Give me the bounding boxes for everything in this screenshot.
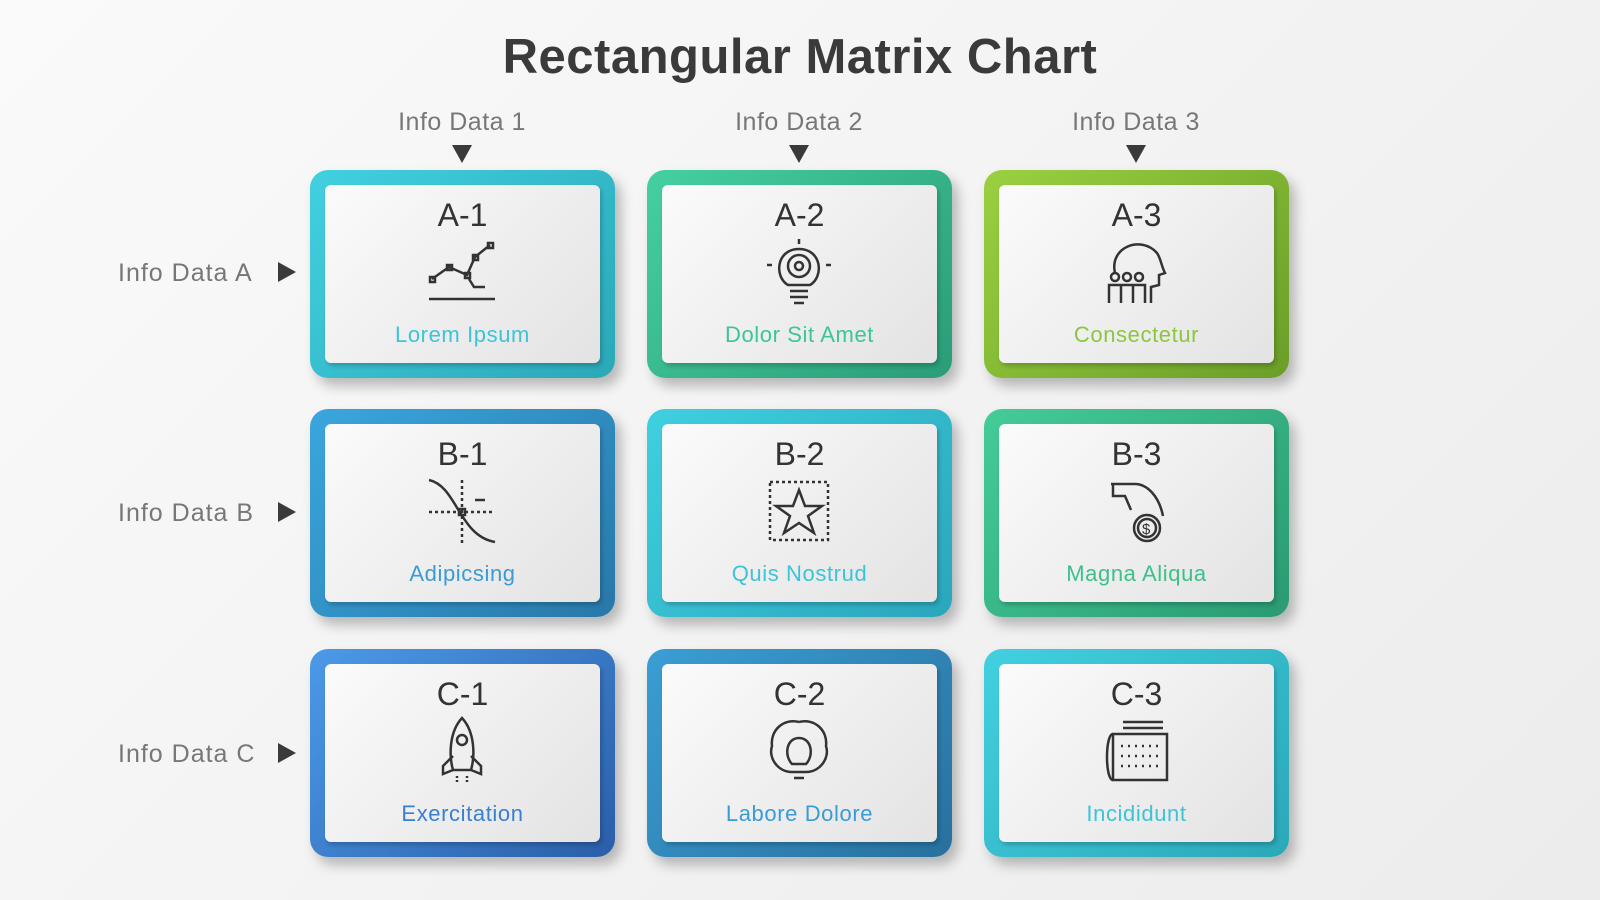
icon: star in frame [768, 480, 830, 542]
card C-1: Exercitation [401, 801, 524, 826]
card C-1 [310, 649, 615, 857]
card A-1 [310, 170, 615, 378]
icon: hand with coin [1111, 482, 1164, 542]
card C-3 [984, 649, 1289, 857]
card C-3: C-3 [1111, 676, 1162, 712]
card A-2: Dolor Sit Amet [725, 322, 874, 347]
card B-1: Adipicsing [409, 561, 516, 586]
row header C: Info Data C [118, 740, 255, 768]
card C-2 [647, 649, 952, 857]
card B-1: B-1 [438, 436, 487, 472]
icon: lightbulb gear [767, 239, 831, 304]
row header A: Info Data A [118, 259, 253, 287]
card A-3: A-3 [1112, 197, 1161, 233]
card B-2: Quis Nostrud [732, 561, 867, 586]
card A-3: Consectetur [1074, 322, 1199, 347]
icon: head with team [1108, 243, 1167, 303]
column header 1 [398, 108, 526, 163]
card B-2: B-2 [775, 436, 824, 472]
card A-3 [984, 170, 1289, 378]
icon: line chart [428, 242, 495, 300]
column header 3 [1072, 108, 1200, 163]
column header 2 [735, 108, 863, 163]
icon: curve chart [428, 478, 496, 544]
card C-3: Incididunt [1086, 801, 1187, 826]
card A-2: A-2 [775, 197, 824, 233]
card A-2 [647, 170, 952, 378]
card A-1: A-1 [438, 197, 487, 233]
icon: rocket [442, 716, 482, 782]
column header 3: Info Data 3 [1072, 108, 1200, 136]
card A-1: Lorem Ipsum [395, 322, 530, 347]
card B-3 [984, 409, 1289, 617]
card B-1 [310, 409, 615, 617]
card B-2 [647, 409, 952, 617]
column header 2: Info Data 2 [735, 108, 863, 136]
card C-2: Labore Dolore [726, 801, 873, 826]
icon: brain bulb [770, 720, 828, 780]
column header 1: Info Data 1 [398, 108, 526, 136]
card C-1: C-1 [437, 676, 488, 712]
card B-3: B-3 [1112, 436, 1161, 472]
card B-3: Magna Aliqua [1066, 561, 1207, 586]
card C-2: C-2 [774, 676, 825, 712]
row header B: Info Data B [118, 499, 254, 527]
icon: calendar [1106, 720, 1168, 782]
title: Rectangular Matrix Chart [503, 30, 1097, 84]
icon: hand with coin: $ [1142, 521, 1151, 538]
